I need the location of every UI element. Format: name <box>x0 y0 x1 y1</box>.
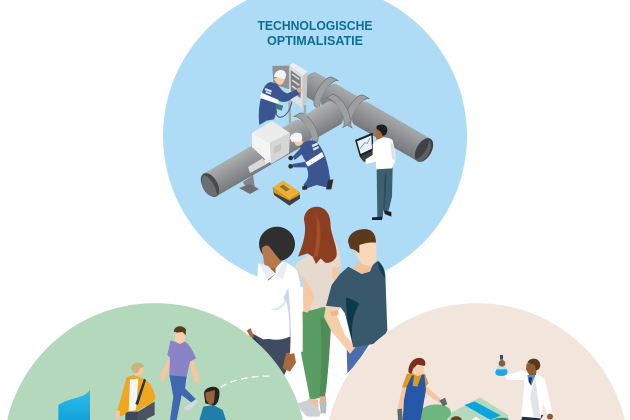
worker in blue overalls <box>397 358 447 420</box>
title: Technologische optimalisatie <box>258 18 373 48</box>
engineer kneeling <box>288 133 333 190</box>
panel: beige circle <box>329 303 625 420</box>
title: Technologische optimalisatie: TECHNOLOGISCHE <box>258 18 373 33</box>
blue flag <box>58 390 90 420</box>
panel: green circle <box>7 303 303 420</box>
dashed path line <box>221 376 272 387</box>
panel: technological optimisation circle <box>163 0 467 288</box>
group of three people <box>247 207 387 417</box>
engineer at cabinet <box>259 70 302 125</box>
woman in teal top <box>199 387 226 420</box>
man in teal shirt <box>324 229 387 373</box>
woman in green trousers <box>295 207 341 417</box>
illustration: people walking <box>58 326 272 420</box>
toolbox <box>273 181 300 206</box>
illustration: worker and scientist with puzzle <box>397 355 553 420</box>
woman in white blouse <box>247 227 303 376</box>
control cabinet <box>272 63 307 123</box>
pipe: left section <box>197 95 350 200</box>
title: Technologische optimalisatie: OPTIMALISATIE <box>267 33 363 48</box>
person in yellow jacket with bag <box>115 363 155 420</box>
pipe: right section <box>301 72 437 165</box>
valve housing box <box>248 121 290 173</box>
pipe support stand <box>239 175 259 194</box>
man in purple shirt <box>160 326 199 420</box>
puzzle landscape <box>420 397 508 420</box>
scientist in lab coat <box>495 355 553 420</box>
analyst with laptop <box>355 125 396 220</box>
illustration: pipeline with engineers <box>197 63 437 220</box>
